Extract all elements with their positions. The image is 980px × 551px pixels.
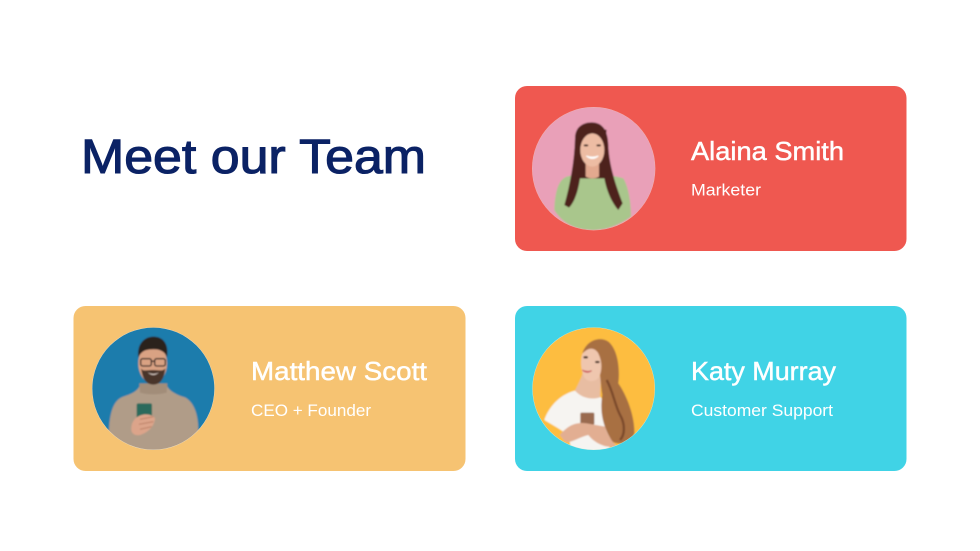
- role: Marketer: Marketer: [691, 180, 761, 200]
- role: CEO + Founder: CEO + Founder: [251, 401, 371, 420]
- name: Alaina Smith: Alaina Smith: [691, 136, 844, 166]
- name: Katy Murray: Katy Murray: [691, 356, 836, 386]
- panel: Alaina Smith: [515, 86, 906, 251]
- title: Meet our Team: [81, 131, 426, 184]
- panel: Katy Murray: [515, 306, 906, 471]
- role: Customer Support: Customer Support: [691, 401, 833, 420]
- name: Matthew Scott: Matthew Scott: [251, 356, 428, 386]
- panel: Matthew Scott: [74, 306, 466, 471]
- portrait: Alaina Smith: [532, 107, 656, 230]
- portrait: Matthew Scott: [92, 327, 215, 450]
- portrait: Katy Murray: [532, 327, 655, 450]
